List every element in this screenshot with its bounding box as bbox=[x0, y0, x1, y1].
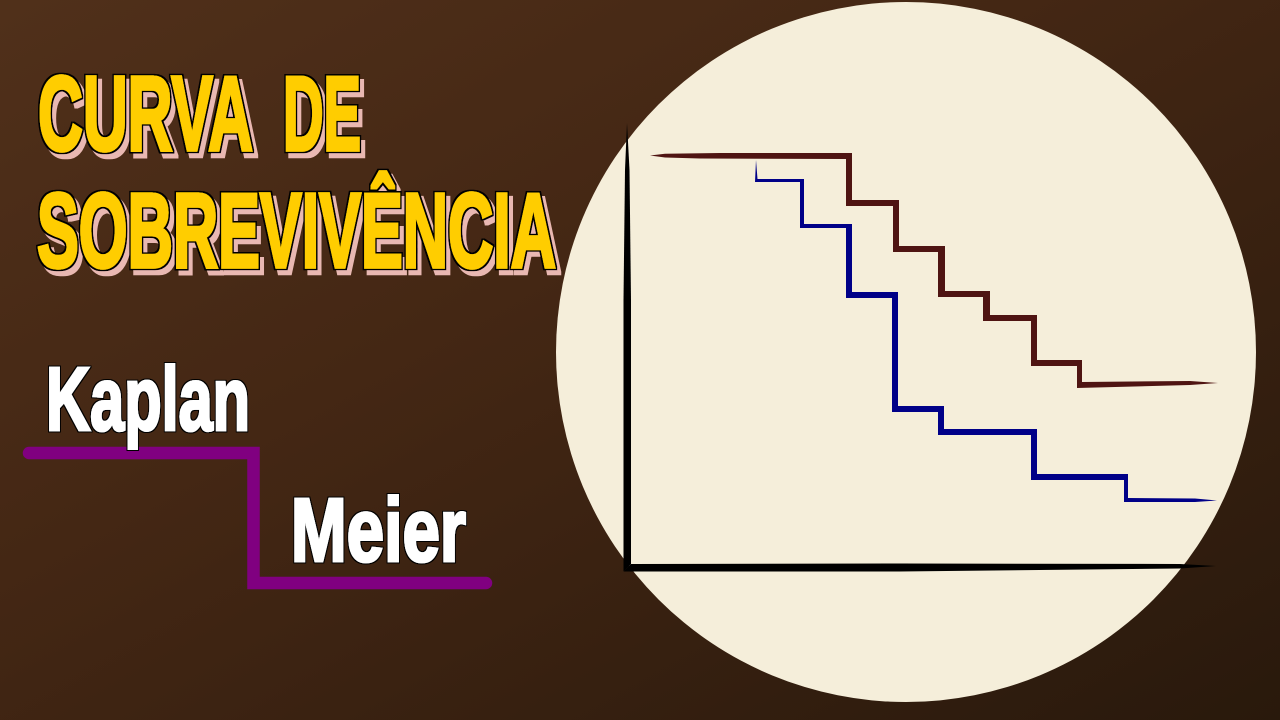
title line 2: SOBREVIVÊNCIA bbox=[37, 172, 556, 290]
curve: dark red bbox=[650, 153, 1218, 388]
chart: survival curves bbox=[624, 123, 1218, 572]
title line 1: DE bbox=[283, 55, 361, 173]
x axis bbox=[624, 564, 1216, 572]
title line 1: CURVA bbox=[38, 55, 253, 173]
label: Kaplan: Kaplan bbox=[46, 350, 250, 450]
step line: purple bbox=[29, 453, 486, 583]
curve: blue bbox=[755, 160, 1217, 502]
title bbox=[37, 55, 556, 290]
label: Meier: Meier bbox=[291, 481, 466, 581]
panel: chart circle bbox=[556, 2, 1256, 702]
y axis bbox=[624, 123, 631, 572]
